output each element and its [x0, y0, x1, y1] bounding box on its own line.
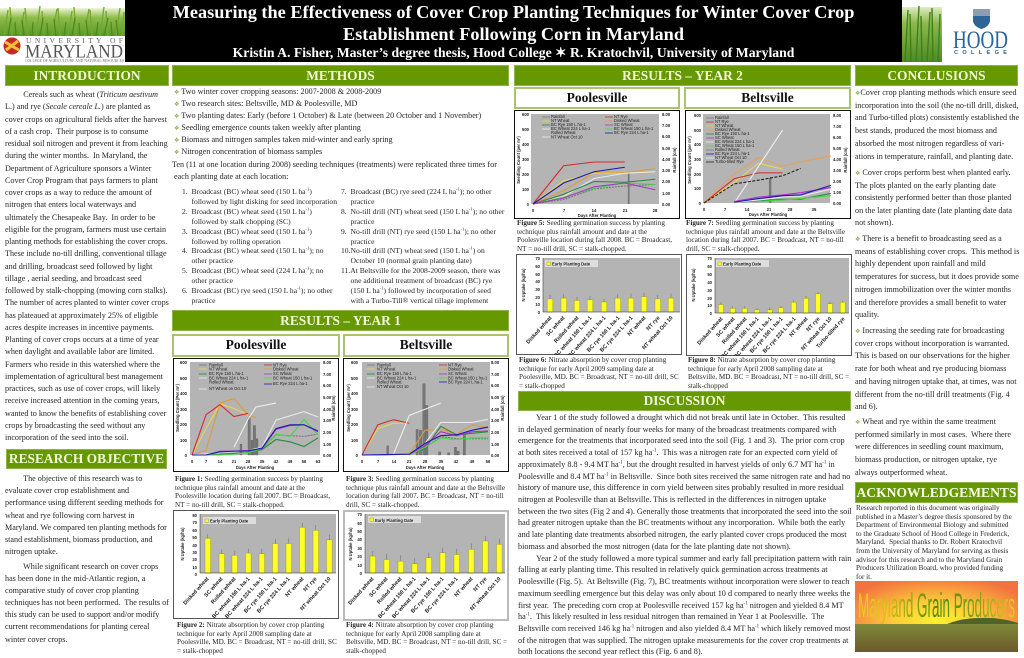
figure 1 line chart: 6.00: [323, 383, 332, 388]
figure 4 bar chart: NT rye: [473, 576, 488, 593]
figure 1 line chart: Seedling Count (Per m²): [175, 384, 180, 432]
figure 1 line chart: 56: [302, 459, 307, 464]
figure 3 line chart: Disked Wheat: [448, 366, 474, 372]
figure 7 line chart: 500: [694, 128, 702, 133]
figure 4 bar chart: 60: [357, 521, 363, 526]
figure 6 bar chart: 70: [535, 256, 541, 261]
figure 7 line chart: 200: [694, 172, 702, 177]
text: introduction: Cereals such as wheat (Triticum aestivum L.) and rye (Secale cereale L.) are planted as cover crops on agricultural fields after the harvest of a cash crop. Their purpose is to consume residual soil nitrogen and prevent it from leaching during the winter months. In Maryland, the Department of Agriculture sponsors a Winter Cover Crop Program that pays farmers to plant cover crops as a way to reduce the amount of nitrogen that enters local waterways and ultimately the Chesapeake Bay. In order to be eligible for the program, farmers must use certain planting methods for establishing the cover crops. These include no-till drilling, conventional tillage and drilling, broadcast seed followed by light tillage , aerial seeding, and broadcast seed followed by stalk-chopping (mowing corn stalks). The number of acres planted to winter cover crops has plateaued at approximately 25% of eligible acres despite increases in incentive payments. Planting of cover crops occurs at a time of year when daylight and available labor are limited. Farmers who reside in this watershed where the implementation of agricultural best management practices, such as use of cover crops, will likely receive increased attention in the coming years, wanted to know the benefits of establishing cover crops by broadcasting the seed without any incorporation of the seed into the soil.: [5, 90, 169, 442]
text: acknowledgements: Research reported in this document was originally published in a Master’s degree thesis sponsored by the Department of Environmental Biology and submitted to the Graduate School of Hood College in Frederick, Maryland. Special thanks to Dr. Robert Kratochvil from the University of Maryland for serving as thesis advisor for this research and to the Maryland Grain Producers Utilization Board, who provided funding for it.: [856, 504, 1012, 581]
figure 7 line chart: NT Wheat: [715, 123, 734, 128]
right header image: grass and Hood College logo: HOOD: [953, 27, 1008, 54]
figure 8 bar chart: Turbo-tilled rye: [816, 316, 846, 350]
figure 5 line chart: 0: [527, 202, 530, 207]
heading: introduction: [5, 65, 169, 86]
figure 3 line chart: 100: [351, 438, 359, 443]
figure 3 line chart: SC Wheat: [448, 371, 468, 376]
figure 4 bar chart: 50: [357, 529, 363, 534]
figure 3 line chart: 2.00: [491, 430, 500, 435]
figure 4 bar chart: N Uptake (kg/ha): [348, 527, 353, 561]
figure 1 line chart: 400: [180, 391, 188, 396]
conclusion 4: ❖ Increasing the seeding rate for broadcasting cover crops without incorporation is warranted. This is based on our observations for the higher rate for both wheat and rye producing biomass and having nitrogen uptake that, at times, was not different from the no-till drill treatments (Fig. 4 and 6).: [855, 326, 1017, 411]
figure 4 bar chart: Early Planting Date: [375, 518, 414, 523]
figure 5 line chart: Disked Wheat: [614, 118, 640, 123]
figure 3 line chart: 8.00: [491, 360, 500, 365]
figure 1 line chart: BC Rye 224 L ha-1: [273, 381, 308, 386]
figure 5 line chart: 3.00: [662, 168, 671, 173]
figure 3 line chart: 0: [356, 453, 359, 458]
figure 8 bar chart: Early Planting Date: [723, 262, 762, 266]
figure 3 line chart: NT Rye: [448, 362, 463, 368]
figure 7 line chart: 0: [703, 207, 706, 212]
figure 3 line chart: 300: [351, 407, 359, 412]
figure 3 line chart: 28: [423, 459, 428, 464]
figure 8 bar chart: Disked wheat: [697, 316, 725, 346]
figure 6 bar chart: Rolled wheat: [553, 315, 581, 345]
figure 1 line chart: 500: [180, 376, 188, 381]
site label: Poolesville year 2: Poolesville: [567, 90, 627, 105]
figure 5 line chart: 5.00: [662, 146, 671, 151]
figure 2 bar chart: BC wheat 150 L ha-1: [211, 576, 251, 619]
figure 5 line chart: 0: [532, 208, 535, 213]
figure 8 bar chart: 10: [707, 303, 713, 308]
figure 1 line chart: 0.00: [323, 453, 332, 458]
text: research objective: The objective of this research was to evaluate cover crop establishment and performance using different seeding methods for wheat and rye following corn harvest in Maryland. We compared ten planting methods for stand establishment, biomass production, and nitrogen uptake.: [5, 474, 167, 556]
heading: discussion: [518, 391, 851, 411]
figure 8 bar chart: 0: [710, 311, 713, 316]
figure 7 line chart: 400: [694, 142, 702, 147]
figure 1 line chart: 200: [180, 422, 188, 427]
conclusion 2: ❖ Cover crops perform best when planted early. The plots planted on the early planting date consistently performed better than those planted on the later planting date (late planting date data not shown).: [855, 168, 1012, 227]
figure 1 line chart: 5.00: [323, 395, 332, 400]
figure 5 line chart: 100: [522, 187, 530, 192]
figure 3 line chart: 49: [470, 459, 475, 464]
figure 6 bar chart: 30: [535, 287, 541, 292]
figure 2 bar chart: Early Planting Date: [210, 518, 249, 524]
figure 7 line chart: 4.00: [833, 157, 842, 162]
figure 1 line chart: Days After Planting: [236, 465, 275, 470]
figure 2 bar chart: [173, 510, 339, 619]
heading: conclusions: [855, 65, 1018, 86]
figure 8 bar chart: 40: [707, 280, 713, 285]
figure 1 line chart: BC Wheat 150 L ha-1: [273, 376, 313, 380]
figure 2 bar chart: 0: [195, 572, 198, 577]
figure 8 bar chart: 50: [707, 272, 713, 277]
figure 7 line chart: Turbo-tilled Rye: [715, 159, 744, 164]
figure 4 bar chart: NT wheat Oct 10: [469, 576, 502, 612]
header band: [125, 0, 902, 62]
figure 7 line chart: 5.00: [833, 146, 842, 151]
figure 8 bar chart: 20: [707, 296, 713, 301]
figure 8 bar chart: SC wheat: [715, 316, 737, 339]
figure 5 line chart: [514, 110, 680, 219]
figure 1 line chart: SC Wheat: [273, 371, 293, 376]
figure 3 line chart: 400: [351, 391, 359, 396]
figure 5 line chart: 1.00: [662, 191, 671, 196]
figure 1 line chart: BC Wheat 224 L ha-1: [209, 376, 249, 380]
right header image: grass and Hood College logo: COLLEGE: [954, 50, 1007, 56]
figure 8 bar chart: BC rye 150 L ha-1: [749, 316, 784, 355]
logo: Maryland Grain Producers: [855, 581, 1018, 652]
figure 3 line chart: BC Wheat 224 L ha-1: [377, 376, 417, 380]
figure 3 line chart: BC Rye 150 L ha-1: [377, 371, 412, 376]
figure 5 line chart: 21: [623, 208, 628, 213]
figure 1 line chart: 63: [316, 459, 321, 464]
figure 2 caption: Figure 2: Nitrate absorption by cover crop planting technique for early April 2008 sampling date at Poolesville, MD. BC = Broadcast, NT = no-till drill, SC = stalk-chopped: [177, 621, 337, 655]
figure 1 line chart: [173, 358, 339, 472]
figure 5 line chart: NT Wheat: [551, 118, 570, 123]
figure 3 line chart: 6.00: [491, 383, 500, 388]
figure 6 bar chart: NT rye: [646, 315, 661, 332]
figure 5 line chart: Rainfall: [551, 114, 565, 119]
figure 4 bar chart: [343, 510, 509, 621]
figure 2 bar chart: 70: [192, 520, 198, 525]
figure 3 line chart: 7: [377, 459, 380, 464]
figure 5 line chart: 500: [522, 127, 530, 132]
figure 3 line chart: 0: [361, 459, 364, 464]
figure 1 line chart: 7.00: [323, 372, 332, 377]
figure 3 line chart: Rolled Wheat: [377, 380, 402, 384]
figure 3 line chart: 5.00: [491, 395, 500, 400]
figure 6 bar chart: Early Planting Date: [552, 262, 591, 266]
figure 8 bar chart: [686, 254, 852, 356]
heading: discussion: DISCUSSION: [644, 393, 725, 408]
figure 5 caption: Figure 5: Seedling germination success by planting technique plus rainfall amount and date at the Poolesville location during fall 2008. BC = Broadcast, NT = no-till drill, SC = stalk-chopped.: [517, 219, 672, 253]
figure 3 line chart: 500: [351, 376, 359, 381]
figure 6 bar chart: N Uptake (kg/ha): [521, 268, 526, 302]
figure 8 bar chart: N Uptake (kg/ha): [691, 268, 696, 302]
heading: conclusions: CONCLUSIONS: [887, 68, 986, 83]
figure 5 line chart: NT Rye: [614, 114, 629, 119]
figure 3 line chart: 42: [454, 459, 459, 464]
figure 7 line chart: 7.00: [833, 124, 842, 129]
figure 5 line chart: 4.00: [662, 157, 671, 162]
figure 7 line chart: 0: [699, 201, 702, 206]
figure 7 line chart: 0.00: [833, 201, 842, 206]
figure 1 line chart: 1.00: [323, 442, 332, 447]
figure 3 line chart: BC Rye 224 L ha-1: [448, 380, 483, 384]
figure 7 line chart: 14: [745, 207, 750, 212]
figure 6 bar chart: BC rye 150 L ha-1: [586, 315, 621, 354]
figure 2 bar chart: 40: [192, 543, 198, 548]
figure 2 bar chart: 80: [192, 513, 198, 518]
figure 5 line chart: Seedling Count (per m²): [516, 136, 521, 184]
figure 1 line chart: Rolled Wheat: [209, 380, 234, 384]
figure 2 bar chart: BC rye 224 L ha-1: [256, 576, 291, 615]
figure 1 line chart: 28: [246, 459, 251, 464]
figure 6 bar chart: 40: [535, 279, 541, 284]
figure 7 line chart: 600: [694, 113, 702, 118]
figure 3 line chart: Days After Planting: [406, 465, 445, 470]
figure 5 line chart: 0.00: [662, 202, 671, 207]
heading: results year 1: [172, 310, 509, 331]
figure 7 caption: Figure 7: Seedling germination success by planting technique plus rainfall amount and date at the Beltsville location during fall 2007. BC = Broadcast, NT = no-till drill, SC = stalk-chopped.: [686, 219, 845, 253]
figure 8 caption: Figure 8: Nitrate absorption by cover crop planting technique for early April 2008 sampling date at Beltsville, MD. BC = Broadcast, NT = no-till drill, SC = stalk-chopped: [688, 356, 849, 390]
figure 7 line chart: NT Wheat Oct 10: [715, 155, 747, 160]
figure 1 line chart: NT Rye: [273, 362, 288, 368]
figure 5 line chart: 6.00: [662, 134, 671, 139]
figure 3 line chart: 56: [486, 459, 491, 464]
figure 2 bar chart: 60: [192, 528, 198, 533]
figure 7 line chart: 6.00: [833, 135, 842, 140]
figure 3 line chart: Rainfall: [377, 362, 391, 368]
figure 3 line chart: [343, 358, 509, 472]
figure 5 line chart: 2.00: [662, 179, 671, 184]
figure 3 caption: Figure 3: Seedling germination success by planting technique plus rainfall amount and date at the Beltsville location during fall 2007. BC = Broadcast, NT = no-till drill, SC = stalk-chopped.: [346, 475, 505, 509]
site label: Poolesville year 1: Poolesville: [226, 337, 286, 352]
figure 2 bar chart: 30: [192, 550, 198, 555]
figure 8 bar chart: 70: [707, 256, 713, 261]
figure 3 line chart: 7.00: [491, 372, 500, 377]
figure 4 bar chart: NT wheat: [454, 576, 475, 599]
figure 4 bar chart: 20: [357, 554, 363, 559]
figure 3 line chart: BC Wheat 150 L ha-1: [448, 376, 488, 380]
figure 1 line chart: 21: [232, 459, 237, 464]
figure 8 bar chart: Rolled wheat: [721, 316, 749, 346]
figure 3 line chart: 200: [351, 422, 359, 427]
figure 4 bar chart: 10: [357, 563, 363, 568]
heading: results year 1: RESULTS – YEAR 1: [280, 313, 401, 328]
heading: results year 2: RESULTS – YEAR 2: [622, 68, 743, 83]
figure 7 line chart: 100: [694, 186, 702, 191]
figure 1 line chart: 14: [218, 459, 223, 464]
figure 4 bar chart: BC wheat 224 L ha-1: [391, 576, 431, 620]
figure 3 line chart: 35: [439, 459, 444, 464]
site label: Beltsville year 1: [343, 334, 509, 357]
figure 5 line chart: 8.00: [662, 112, 671, 117]
figure 3 line chart: 21: [407, 459, 412, 464]
left header image: grass and University of Maryland logo: UNIVERSITY OF: [26, 36, 123, 45]
figure 1 line chart: BC Rye 150 L ha-1: [209, 371, 244, 376]
figure 2 bar chart: NT wheat: [285, 576, 306, 599]
figure 6 bar chart: [516, 254, 682, 355]
figure 6 bar chart: NT wheat Oct 10: [641, 315, 674, 351]
title: Measuring the Effectiveness of Cover Crop Planting Techniques for Winter Cover Crop Establishment Following Corn in Maryland: [173, 2, 854, 44]
figure 1 line chart: 0: [191, 459, 194, 464]
figure 6 bar chart: 10: [535, 302, 541, 307]
figure 2 bar chart: SC wheat: [203, 576, 225, 599]
figure 7 line chart: Disked Wheat: [715, 127, 741, 132]
heading: research objective: RESEARCH OBJECTIVE: [9, 451, 164, 466]
figure 5 line chart: SC Wheat: [614, 122, 634, 127]
text: significance of the study: While significant research on cover crops has been done in the mid-Atlantic region, a comparative study of cover crop planting techniques has not been performed. The results of this study can be used to support and/or modify current recommendations for planting cereal winter cover crops.: [5, 562, 169, 644]
figure 5 line chart: Rainfall (cm): [672, 147, 677, 173]
figure 6 bar chart: NT wheat: [627, 315, 648, 338]
figure 2 bar chart: NT wheat Oct 10: [299, 576, 332, 612]
figure 1 line chart: 49: [288, 459, 293, 464]
figure 1 line chart: NT Wheat: [209, 366, 228, 372]
figure 8 bar chart: NT wheat: [789, 316, 810, 339]
figure 7 line chart: BC Wheat 150 L ha-1: [715, 143, 755, 148]
figure 7 line chart: 3.00: [833, 168, 842, 173]
figure 6 bar chart: 20: [535, 295, 541, 300]
figure 3 line chart: 4.00: [491, 407, 500, 412]
figure 3 line chart: 0.00: [491, 453, 500, 458]
figure 5 line chart: 14: [592, 208, 597, 213]
figure 7 line chart: NT Rye: [715, 119, 730, 124]
figure 7 line chart: 300: [694, 157, 702, 162]
figure 1 line chart: 600: [180, 360, 188, 365]
figure 2 bar chart: NT rye: [303, 576, 318, 593]
figure 1 line chart: NT Wheat on Oct 10: [209, 386, 247, 391]
figure 7 line chart: Rainfall (cm): [843, 147, 848, 173]
text: discussion: Year 1 of the study followed a drought which did not break until late in October. This resulted in delayed germination of nearly four weeks for many of the broadcast treatments compared with emergence for the treatments that incorporated seed into the soil (Fig. 1 and 3). The prior corn crop at both sites received a total of 157 kg ha-1. This was a nitrogen rate for an expected corn yield of approximately 8.8 - 9.4 MT ha-1, but the drought resulted in harvest yields of only 6.7 MT ha-1 in Poolesville and 8.4 MT ha-1 in Beltsville. Since both sites received the same nitrogen rate and had no history of manure use, this difference in corn yield between sites probably resulted in more residual nitrogen at Poolesville than at Beltsville. This is reflected in the differences in nitrogen uptake between the two sites (Fig 2 and 4). Generally those treatments that incorporated the seed into the soil had greater nitrogen uptake than the BC treatments without any incorporation. While both the early and late planting date treatments absorbed nitrogen, the early planted cover crops produced the most biomass and absorbed the most nitrogen (data for the late planting date not shown). Year 2 of the study followed a more typical summer and early fall precipitation pattern with rain falling at early planting time. This resulted in relatively quick germination across treatments at Poolesville (Fig. 5). At Beltsville (Fig. 7), BC treatments without incorporation were slower to reach maximum seedling emergence but this delay was only about 10 d compared to nearly three weeks the first year. The preceding corn crop at Poolesville received 157 kg ha-1 nitrogen and yielded 8.4 MT ha-1. This likely resulted in less residual nitrogen than remained in Year 1 at Poolesville. The Beltsville corn received 146 kg ha-1 nitrogen and also yielded 8.4 MT ha-1 which likely removed most of the nitrogen that was supplied. The nitrogen uptake measurements for the cover crop treatments at both locations the second year reflect this (Fig. 6 and 8).: [518, 413, 852, 656]
figure 5 line chart: 7: [563, 208, 566, 213]
figure 6 bar chart: Disked wheat: [526, 315, 554, 345]
figure 7 line chart: Seedling Count (per m²): [687, 136, 692, 184]
site label: Beltsville year 2: Beltsville: [741, 90, 794, 105]
figure 5 line chart: 28: [653, 208, 658, 213]
figure 8 bar chart: NT wheat Oct 10: [800, 316, 833, 352]
figure 4 bar chart: SC wheat: [368, 576, 390, 599]
figure 8 bar chart: 60: [707, 264, 713, 269]
figure 7 line chart: SC Wheat: [715, 135, 735, 140]
site label: Poolesville year 2: [514, 87, 680, 109]
figure 8 bar chart: BC rye 224 L ha-1: [762, 316, 797, 355]
figure 4 bar chart: 0: [360, 571, 363, 576]
figure 3 line chart: 1.00: [491, 442, 500, 447]
treatment list, right column: 7. Broadcast (BC) rye seed (224 L ha-1); no other practice 8. No-till drill (NT) wheat seed (150 L ha-1); no other practice 9. No-till drill (NT) rye seed (150 L ha-1); no other practice 10.No-till drill (NT) wheat seed (150 L ha-1) on October 10 (normal grain planting date) 11.At Beltsville for the 2008-2009 season, there was one additional treatment of broadcast (BC) rye (150 L ha-1) followed by incorporation of seed with a Turbo-Till® vertical tillage implement: [341, 186, 504, 305]
figure 7 line chart: 8.00: [833, 113, 842, 118]
site label: Poolesville year 1: [172, 334, 340, 357]
figure 5 line chart: NT Wheat Oct 10: [551, 134, 583, 140]
figure 1 line chart: 4.00: [323, 407, 332, 412]
figure 1 line chart: Disked Wheat: [273, 366, 299, 372]
figure 3 line chart: 600: [351, 360, 359, 365]
site label: Beltsville year 2: [684, 87, 851, 109]
figure 2 bar chart: Rolled wheat: [210, 576, 238, 606]
figure 2 bar chart: 10: [192, 565, 198, 570]
figure 7 line chart: BC Rye 224 L ha-1: [715, 151, 750, 156]
figure 5 line chart: 200: [522, 172, 530, 177]
figure 5 line chart: BC Wheat 150 L ha-1: [614, 126, 654, 131]
figure 1 line chart: Rainfall (cm): [331, 395, 336, 421]
left header image: grass and University of Maryland logo: [0, 6, 125, 62]
figure 1 line chart: 7: [205, 459, 208, 464]
figure 7 line chart: 2.00: [833, 179, 842, 184]
figure 6 caption: Figure 6: Nitrate absorption by cover crop planting technique for early April 2009 sampling date at Poolesville, MD. BC = Broadcast, NT = no-till drill, SC = stalk-chopped: [519, 356, 679, 390]
figure 8 bar chart: 30: [707, 288, 713, 293]
figure 5 line chart: Rolled Wheat: [551, 130, 576, 135]
figure 3 line chart: 3.00: [491, 418, 500, 423]
figure 3 line chart: 14: [392, 459, 397, 464]
figure 4 bar chart: 40: [357, 537, 363, 542]
figure 1 line chart: 2.00: [323, 430, 332, 435]
conclusion 5: ❖ Wheat and rye within the same treatment performed similarly in most cases. Where there were differences in seedling count maximum, biomass production, or nitrogen uptake, rye always outperformed wheat.: [855, 417, 1011, 477]
figure 2 bar chart: BC rye 150 L ha-1: [243, 576, 278, 615]
figure 4 bar chart: Disked wheat: [348, 576, 376, 606]
figure 3 line chart: Seedling Count (per m²): [346, 384, 351, 432]
figure 7 line chart: Days After Planting: [749, 212, 788, 217]
figure 1 line chart: 8.00: [323, 360, 332, 365]
figure 6 bar chart: SC wheat: [545, 315, 567, 338]
figure 4 bar chart: BC rye 224 L ha-1: [424, 576, 459, 615]
figure 6 bar chart: 60: [535, 264, 541, 269]
figure 2 bar chart: 20: [192, 557, 198, 562]
figure 4 bar chart: Rolled wheat: [376, 576, 404, 606]
figure 6 bar chart: 0: [538, 310, 541, 315]
figure 7 line chart: BC Wheat 224 L ha-1: [715, 139, 755, 144]
methods bullet list: ❖ Two winter cover cropping seasons: 2007-2008 & 2008-2009 ❖ Two research sites: Beltsville, MD & Poolesville, MD ❖ Two planting dates: Early (before 1 October) & Late (between 20 October and 1 November) ❖ Seedling emergence counts taken weekly after planting ❖ Biomass and nitrogen samples taken mid-winter and early spring ❖ Nitrogen concentration of biomass samples: [174, 87, 481, 156]
right header image: grass and Hood College logo: [902, 6, 1008, 62]
figure 5 line chart: BC Rye 224 L ha-1: [614, 130, 649, 135]
figure 5 line chart: 7.00: [662, 123, 671, 128]
site label: Beltsville year 1: Beltsville: [400, 337, 452, 352]
figure 7 line chart: Rolled Wheat: [715, 147, 740, 152]
figure 5 line chart: 300: [522, 157, 530, 162]
figure 7 line chart: 7: [724, 207, 727, 212]
figure 1 line chart: 35: [260, 459, 265, 464]
figure 1 line chart: Rainfall: [209, 362, 223, 368]
figure 5 line chart: BC Wheat 224 L ha-1: [551, 126, 591, 131]
figure 5 line chart: Days After Planting: [578, 213, 617, 218]
figure 2 bar chart: Disked wheat: [183, 576, 211, 606]
figure 7 line chart: 35: [812, 207, 817, 212]
heading: results year 2: [514, 65, 851, 86]
figure 7 line chart: 1.00: [833, 190, 842, 195]
treatment list, left column: 1. Broadcast (BC) wheat seed (150 L ha-1) followed by light disking for seed incorporation 2. Broadcast (BC) wheat seed (150 L ha-1) followed by stalk chopping (SC) 3. Broadcast (BC) wheat seed (150 L ha-1) followed by rolling operation 4. Broadcast (BC) wheat seed (150 L ha-1); no other practice 5. Broadcast (BC) wheat seed (224 L ha-1); no other practice 6. Broadcast (BC) rye seed (150 L ha-1); no other practice: [182, 186, 337, 305]
figure 5 line chart: 600: [522, 112, 530, 117]
figure 3 line chart: NT Wheat Oct 10: [377, 384, 409, 389]
figure 4 bar chart: BC wheat 150 L ha-1: [377, 576, 417, 620]
figure 1 line chart: 0: [185, 453, 188, 458]
figure 8 bar chart: NT rye: [806, 316, 821, 333]
byline: Kristin A. Fisher, Master’s degree thesis, Hood College ✶ R. Kratochvil, University of Maryland: [233, 45, 794, 60]
heading: acknowledgements: ACKNOWLEDGEMENTS: [856, 485, 1017, 500]
methods treatment intro: Ten (11 at one location during 2008) seeding techniques (treatments) were replicated three times for each planting date at each location:: [172, 160, 497, 181]
figure 3 line chart: Rainfall (cm): [500, 395, 505, 421]
figure 2 bar chart: N Uptake (kg/ha): [180, 527, 185, 561]
figure 4 bar chart: BC rye 150 L ha-1: [410, 576, 445, 615]
figure 4 caption: Figure 4: Nitrate absorption by cover crop planting technique for early April 2008 sampling date at Beltsville, MD. BC = Broadcast, NT = no-till drill, SC = stalk-chopped: [346, 621, 507, 655]
figure 7 line chart: 28: [788, 207, 793, 212]
figure 7 line chart: 21: [767, 207, 772, 212]
figure 6 bar chart: 50: [535, 272, 541, 277]
heading: methods: METHODS: [306, 68, 375, 83]
figure 6 bar chart: BC rye 224 L ha-1: [599, 315, 634, 354]
figure 1 line chart: 300: [180, 407, 188, 412]
heading: introduction: INTRODUCTION: [33, 68, 141, 83]
figure 1 line chart: 100: [180, 438, 188, 443]
conclusion 1: ❖Cover crop planting methods which ensure seed incorporation into the soil (the no-till drill, disked, and Turbo-tilled plots) consistently established the best stands, produced the most biomass and absorbed the most nitrogen regardless of vari- ations in temperature, rainfall, and planting date.: [855, 88, 1019, 161]
figure 7 line chart: [685, 110, 851, 219]
figure 1 line chart: 42: [274, 459, 279, 464]
figure 4 bar chart: 30: [357, 546, 363, 551]
figure 5 line chart: BC Rye 150 L ha-1: [551, 122, 586, 127]
figure 3 line chart: NT Wheat: [377, 366, 396, 372]
figure 5 line chart: 400: [522, 142, 530, 147]
figure 2 bar chart: BC wheat 224 L ha-1: [224, 576, 264, 619]
figure 7 line chart: BC Rye 150 L ha-1: [715, 131, 750, 136]
figure 2 bar chart: 50: [192, 535, 198, 540]
heading: methods: [172, 65, 509, 86]
figure 1 caption: Figure 1: Seedling germination success by planting technique plus rainfall amount and date at the Poolesville location during fall 2007. BC = Broadcast, NT = no-till drill, SC = stalk-chopped.: [175, 475, 330, 509]
figure 4 bar chart: 70: [357, 512, 363, 517]
conclusion 3: ❖ There is a benefit to broadcasting seed as a means of establishing cover crops. This method is highly dependent upon rainfall and mild temperatures for success, but it does provide some nitrogen immobilization over the winter months and therefore provides a small benefit to water quality.: [855, 234, 1019, 319]
figure 1 line chart: 3.00: [323, 418, 332, 423]
figure 7 line chart: Rainfall: [715, 115, 729, 120]
